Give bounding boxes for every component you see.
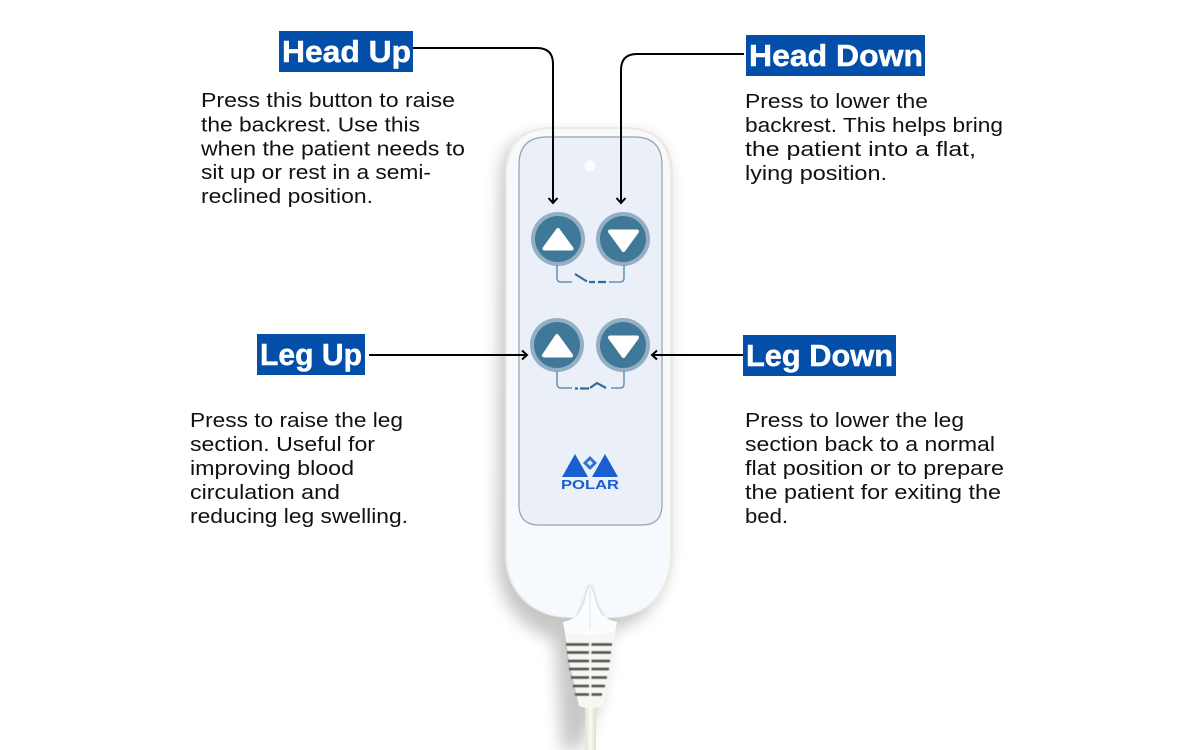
button: head down	[596, 212, 650, 266]
callout: Leg Up	[190, 334, 408, 528]
text: Leg Up description: reducing leg swelling.	[190, 505, 408, 528]
text: Leg Up description: circulation and	[190, 481, 340, 504]
cable	[585, 700, 596, 750]
text: Leg Down description: Press to lower the leg	[745, 409, 964, 432]
heading: Leg Up: Leg Up	[260, 337, 362, 372]
button: leg up	[530, 318, 584, 372]
text: Head Up description	[200, 89, 465, 208]
arrow: Head Up to button	[413, 48, 558, 203]
grip ribs	[566, 644, 612, 694]
arrow: Head Down to button	[616, 54, 744, 203]
text: Head Up description: sit up or rest in a semi-	[201, 161, 431, 184]
text: Leg Down description: flat position or to prepare	[745, 457, 1004, 480]
indicator light	[584, 160, 596, 172]
text: Head Down description: lying position.	[745, 162, 887, 185]
heading: Leg Down: Leg Down	[746, 338, 893, 373]
text: Leg Up description: improving blood	[190, 457, 354, 480]
text: Head Up description: reclined position.	[201, 185, 373, 208]
Polar logo: POLAR	[561, 478, 619, 492]
text: Head Down description: backrest. This helps bring	[745, 114, 1003, 137]
callout: Head Down	[745, 35, 1003, 185]
button: leg down	[596, 318, 650, 372]
remote body	[505, 127, 673, 618]
text: Head Up description: the backrest. Use this	[201, 114, 420, 136]
callout: Leg Down	[743, 335, 1004, 528]
text: Leg Down description: the patient for exiting the	[745, 481, 1001, 504]
text: Head Down description: Press to lower the	[745, 90, 928, 113]
text: Leg Up description: section. Useful for	[190, 433, 375, 456]
text: Leg Up description	[190, 409, 408, 528]
strain relief	[563, 586, 617, 708]
remote control	[497, 127, 673, 750]
heading: Head Up: Head Up	[282, 34, 411, 69]
text: Leg Down description: bed.	[745, 505, 788, 528]
callout: Head Up	[200, 31, 465, 208]
text: Head Up description: Press this button to raise	[201, 89, 455, 112]
arrow: Leg Down to button	[652, 350, 743, 360]
text: Head Down description	[745, 90, 1003, 185]
text: Head Up description: when the patient needs to	[200, 138, 465, 160]
text: Leg Up description: Press to raise the leg	[190, 409, 403, 432]
heading: Head Down: Head Down	[749, 38, 923, 73]
button: head up	[531, 212, 585, 266]
arrow: Leg Up to button	[369, 350, 527, 360]
text: Leg Down description: section back to a normal	[745, 433, 995, 456]
text: Head Down description: the patient into a flat,	[745, 138, 976, 161]
head section bracket symbol	[557, 265, 624, 282]
button panel	[519, 137, 662, 525]
remote shadow	[497, 135, 668, 750]
text: Leg Down description	[745, 409, 1004, 528]
leg section bracket symbol	[557, 371, 624, 388]
Polar logo	[561, 454, 619, 492]
